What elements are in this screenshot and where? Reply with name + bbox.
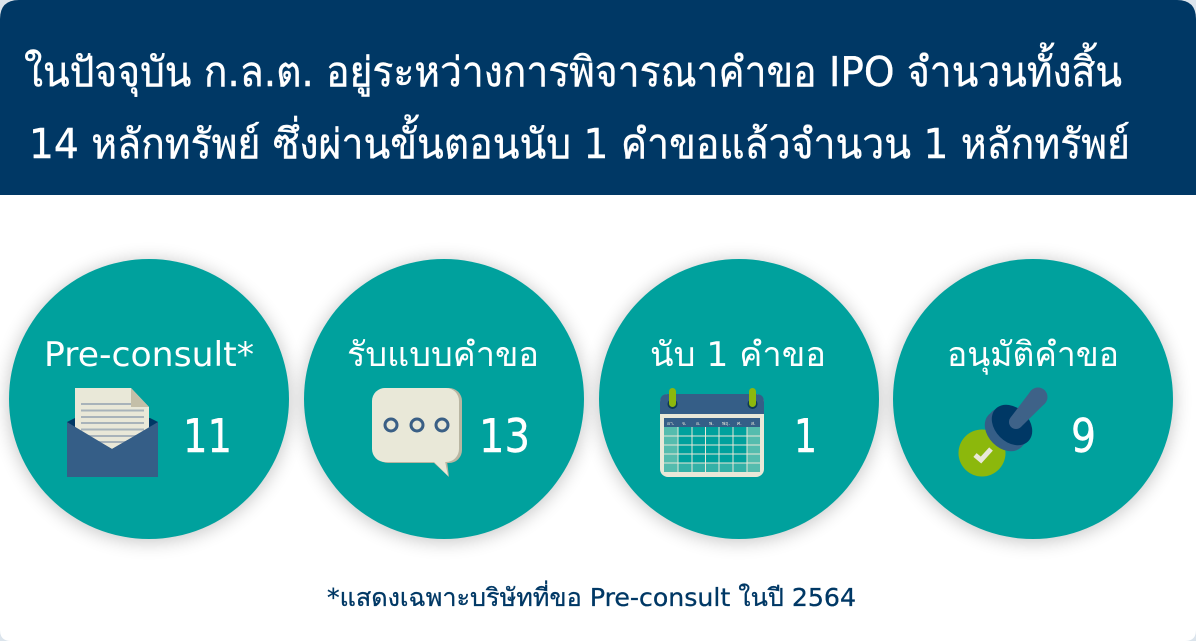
icon: calendar: ศ. (737, 421, 742, 427)
icon: calendar: พ. (709, 421, 714, 427)
label: received filings: รับแบบคำขอ (347, 335, 539, 375)
icon: calendar: อ. (696, 421, 701, 427)
icon: calendar: จ. (682, 421, 687, 427)
value: 13: 13 (479, 409, 530, 463)
panel: Pre-consult (8, 259, 290, 542)
icon: speech bubble (372, 388, 462, 477)
value: 1: 1 (794, 409, 817, 463)
header banner (0, 0, 1196, 195)
panel: first-count filings (598, 259, 880, 542)
panel: received filings (303, 259, 585, 542)
footnote: *แสดงเฉพาะบริษัทที่ขอ Pre-consult ในปี 2564 (327, 580, 856, 612)
icon: approval stamp (958, 388, 1048, 476)
panel: approved filings (892, 259, 1174, 542)
icon: calendar: ส. (751, 421, 756, 427)
icon: calendar: อา. (667, 421, 675, 427)
icon: envelope with letter (67, 388, 158, 477)
label: first-count filings: นับ 1 คำขอ (650, 335, 826, 375)
icon: calendar (660, 388, 764, 477)
value: 9: 9 (1071, 409, 1096, 463)
headline line 1: ในปัจจุบัน ก.ล.ต. อยู่ระหว่างการพิจารณาคำขอ IPO จำนวนทั้งสิ้น (24, 42, 1122, 97)
label: approved filings: อนุมัติคำขอ (947, 335, 1119, 375)
headline line 2: 14 หลักทรัพย์ ซึ่งผ่านขั้นตอนนับ 1 คำขอแล้วจำนวน 1 หลักทรัพย์ (29, 114, 1130, 168)
value: 11: 11 (183, 409, 232, 463)
icon: calendar: พฤ. (722, 421, 730, 427)
label: Pre-consult: Pre-consult* (44, 335, 254, 375)
